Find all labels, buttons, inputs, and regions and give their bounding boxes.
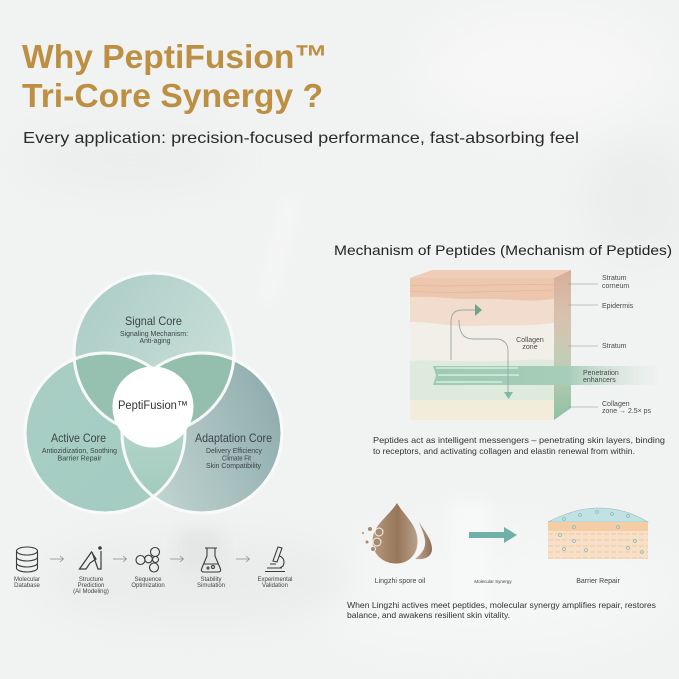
labels: skin layers: Penetration	[583, 370, 619, 377]
label: experimental validation: Experimental	[257, 577, 293, 583]
peptides description: Peptides act as intelligent messengers – penetrating skin layers, binding	[373, 435, 665, 445]
label: adaptation core: Climate Fit	[222, 456, 251, 462]
label: sequence optimization	[131, 577, 165, 589]
arrow 4	[236, 556, 250, 562]
label: collagen zone	[516, 337, 544, 351]
label: structure prediction: Structure	[79, 577, 104, 583]
label: active core: Antiozidization, Soothing	[42, 448, 117, 455]
label: signal core: Signal Core	[125, 314, 182, 328]
penetration enhancer band	[433, 366, 658, 385]
mechanism heading: Mechanism of Peptides (Mechanism of Peptides)	[334, 242, 672, 258]
title: Tri-Core Synergy ?	[22, 77, 323, 114]
venn diagram	[25, 273, 282, 513]
labels: skin layers: zone → 2.5× ps	[602, 408, 651, 415]
label: stability simulation: Stability	[200, 577, 222, 583]
label: active core: Active Core	[51, 431, 106, 445]
labels: skin layers: Epidermis	[602, 303, 634, 310]
label: PeptiFusion: PeptiFusion™	[118, 400, 188, 412]
arrow 3	[170, 556, 184, 562]
center circle	[112, 366, 194, 448]
title: Why PeptiFusion™	[22, 38, 328, 75]
overlap: signal and adaptation	[160, 354, 232, 422]
overlap: signal and active	[76, 354, 148, 421]
icon: lingzhi oil drops	[362, 502, 432, 564]
arrow: synergy	[469, 527, 517, 543]
label: experimental validation	[257, 577, 293, 589]
label: stability simulation: Simulation	[197, 583, 225, 589]
label: molecular database: Molecular	[14, 577, 40, 583]
labels: skin layers: corneum	[602, 283, 629, 290]
block: front layers	[410, 278, 554, 420]
label: signal core: Anti-aging	[140, 338, 171, 345]
synergy description: When Lingzhi actives meet peptides, molecular synergy amplifies repair, restores	[347, 600, 657, 610]
synergy description: balance, and awakens resilient skin vitality.	[347, 610, 510, 620]
labels: synergy row: Molecular Synergy	[474, 579, 512, 584]
label: experimental validation: Validation	[262, 583, 288, 589]
peptides description: to receptors, and activating collagen and elastin renewal from within.	[373, 446, 635, 456]
icon: microscope	[265, 547, 285, 572]
icon: database	[16, 547, 38, 572]
label: adaptation core: Delivery Efficiency	[206, 448, 262, 455]
label: stability simulation	[197, 577, 225, 589]
labels: skin layers: Stratum	[602, 343, 627, 350]
block: top face	[410, 270, 571, 278]
labels: synergy row: Barrier Repair	[576, 578, 620, 585]
peptides description	[373, 435, 665, 456]
label: collagen zone: zone	[522, 344, 538, 351]
labels: synergy row	[375, 578, 620, 585]
label: molecular database	[14, 577, 41, 589]
circle: active core	[25, 353, 185, 513]
title	[22, 38, 328, 114]
label: sequence optimization: Optimization	[131, 583, 165, 589]
labels: skin layers: Collagen	[602, 401, 630, 408]
label: structure prediction: Prediction	[78, 583, 104, 589]
label: structure prediction: (AI Modeling)	[73, 589, 109, 595]
labels: skin layers	[583, 275, 651, 415]
process flow	[14, 547, 293, 595]
block: right side	[554, 270, 571, 420]
label: signal core	[120, 314, 188, 345]
label: adaptation core: Adaptation Core	[195, 431, 272, 445]
enhancer stripes	[436, 368, 519, 382]
label: molecular database: Database	[14, 583, 41, 589]
subtitle: Every application: precision-focused performance, fast-absorbing feel	[23, 130, 579, 147]
label: adaptation core: Skin Compatibility	[206, 463, 261, 470]
arrow 1	[50, 556, 64, 562]
circle: adaptation core	[122, 353, 282, 513]
skin cross-section diagram	[410, 270, 658, 420]
label lines	[568, 284, 598, 407]
icon: AI	[80, 547, 101, 569]
label: sequence optimization: Sequence	[134, 577, 162, 583]
label: active core: Barrier Repair	[58, 456, 102, 462]
arrow 2	[113, 556, 126, 562]
label: adaptation core	[195, 431, 272, 470]
icon: barrier repair skin	[548, 508, 648, 559]
label: structure prediction	[73, 577, 109, 595]
labels: skin layers: Stratum	[602, 275, 627, 282]
arrow: upward curve	[451, 310, 476, 360]
label: active core	[42, 431, 117, 462]
label: collagen zone: Collagen	[516, 337, 544, 344]
icon: flask	[201, 548, 221, 572]
synergy description	[347, 600, 657, 620]
arrow: downward curve	[459, 320, 508, 394]
overlap outlines	[25, 273, 282, 513]
label: signal core: Signaling Mechanism:	[120, 331, 188, 338]
circle: signal core	[74, 273, 234, 433]
icon: sequence	[136, 548, 160, 572]
labels: skin layers: enhancers	[583, 377, 616, 384]
overlap: active and adaptation	[124, 434, 184, 494]
labels: synergy row: Lingzhi spore oil	[375, 578, 426, 585]
